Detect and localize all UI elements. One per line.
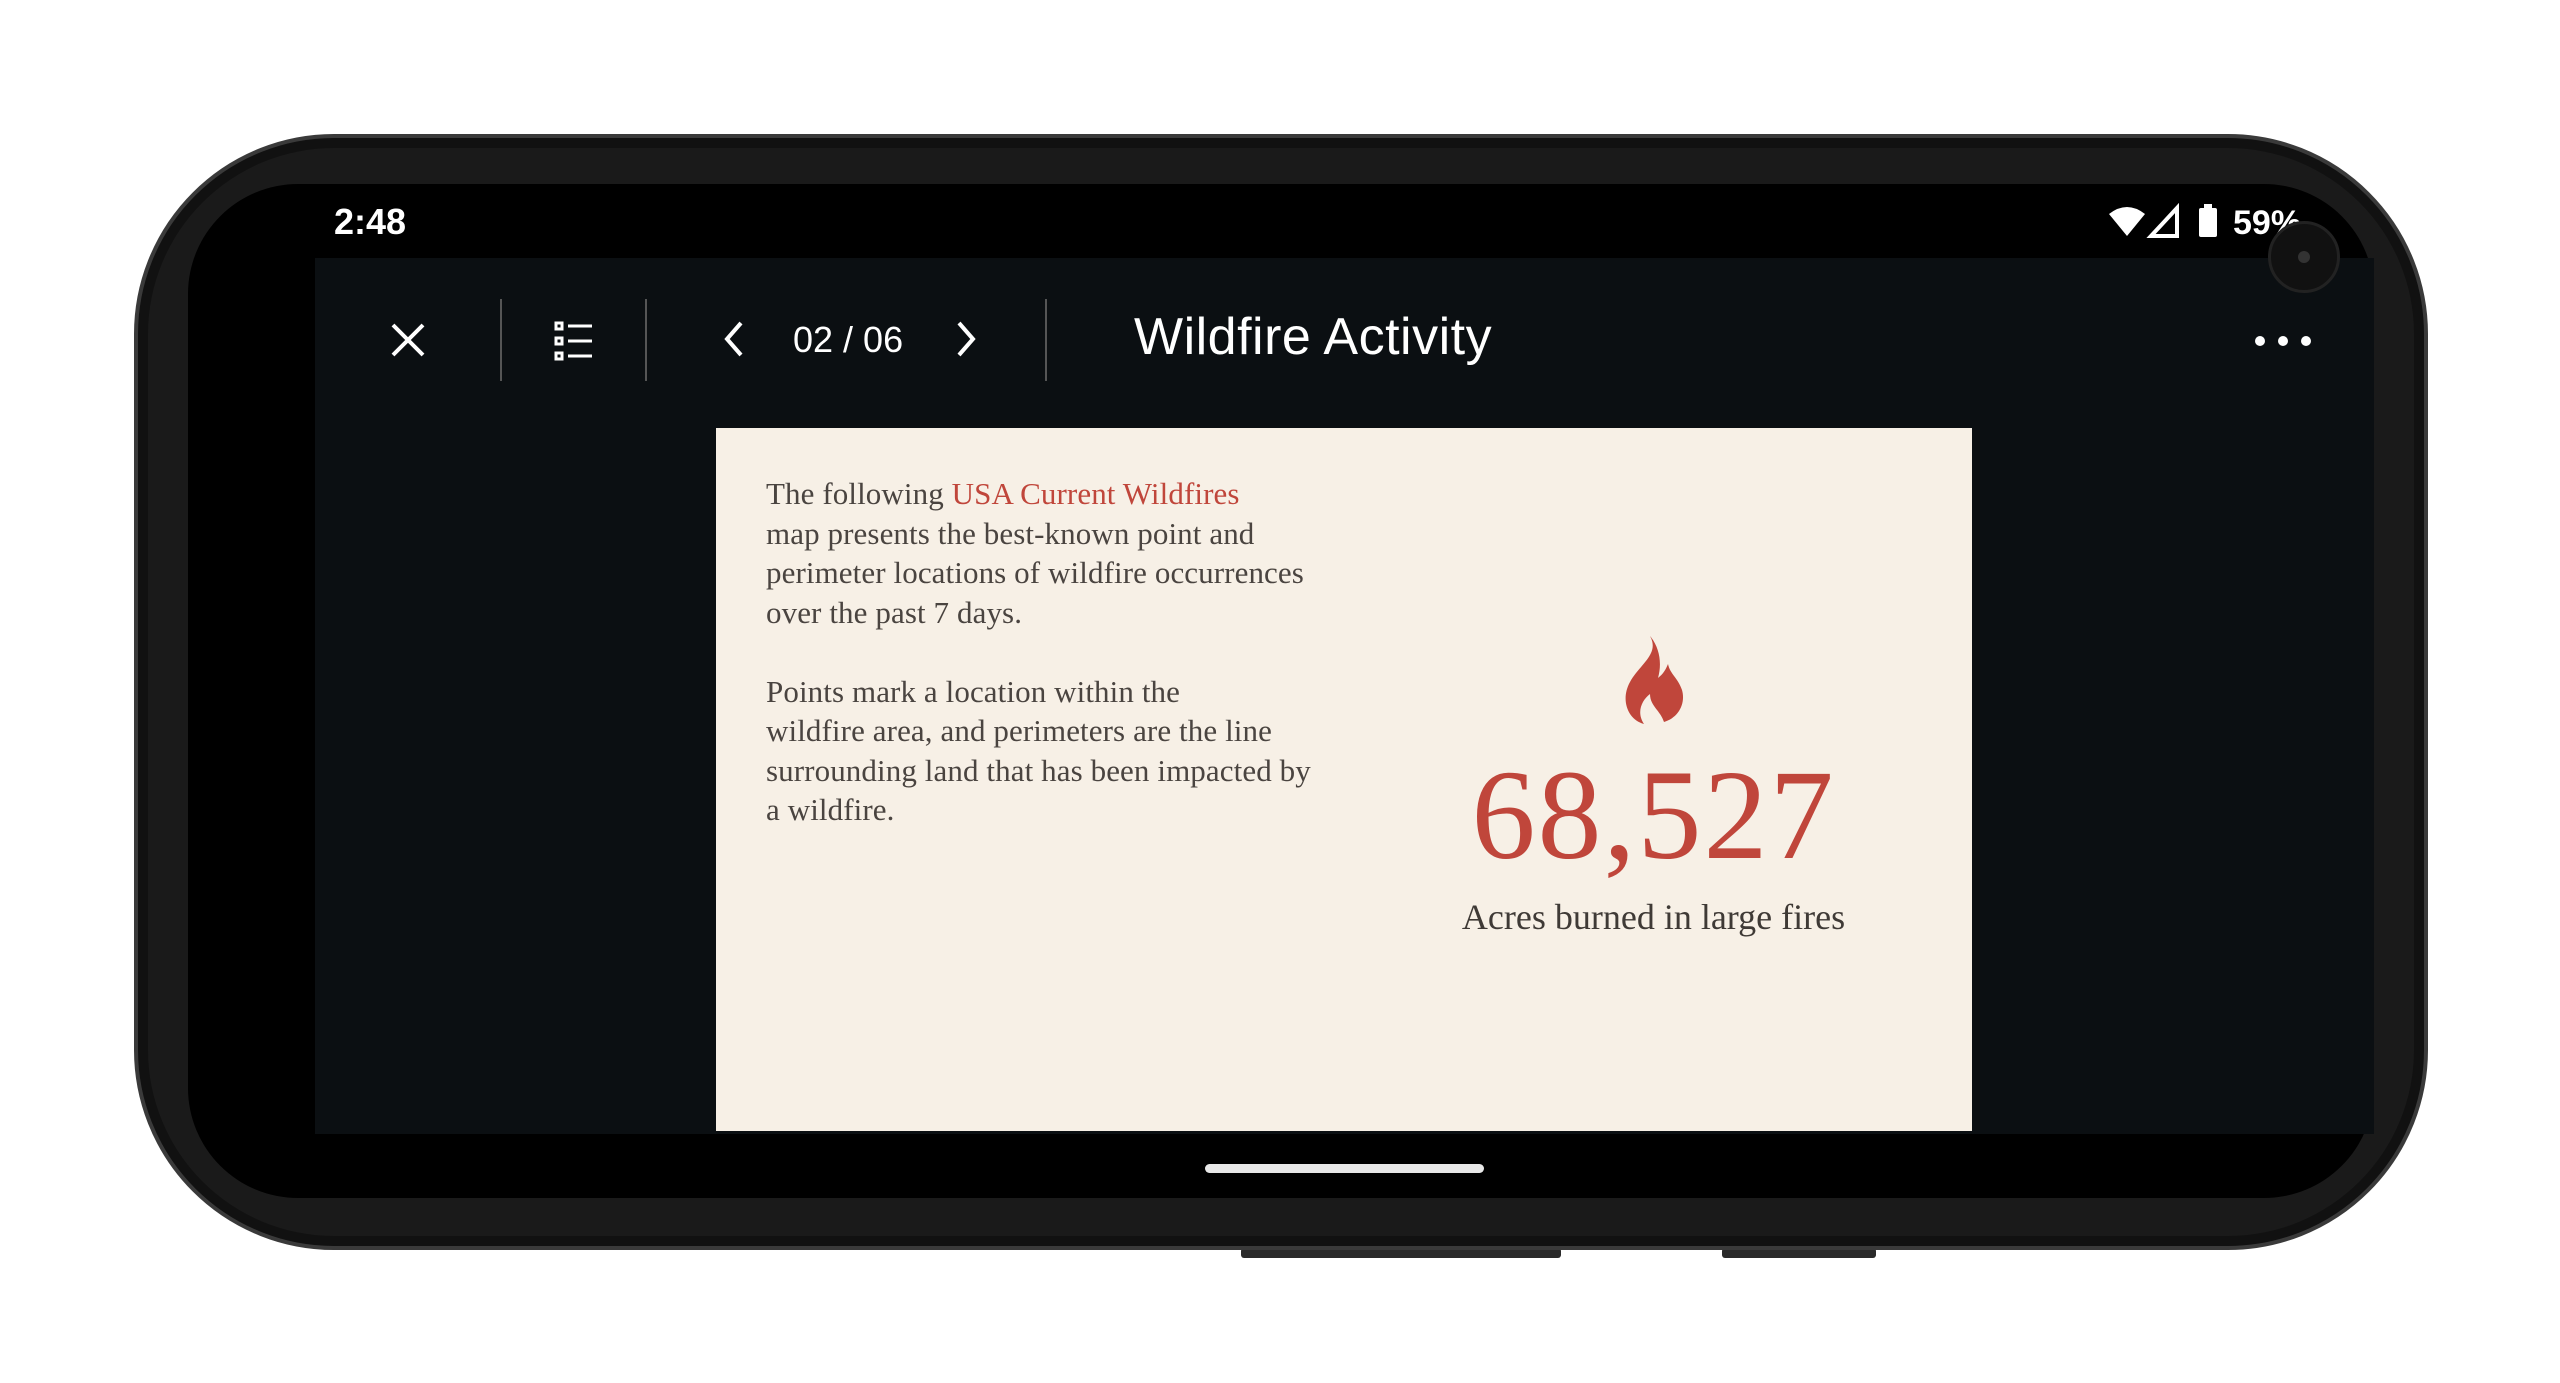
pager: 02 / 06 bbox=[793, 319, 903, 360]
text block: description: wildfire area, and perimeters are the line bbox=[766, 713, 1272, 748]
text block: description: map presents the best-known point and bbox=[766, 516, 1254, 550]
app area bbox=[315, 258, 2374, 1134]
icon: flame bbox=[1626, 636, 1683, 724]
icon: close bbox=[392, 324, 424, 356]
camera bbox=[2268, 221, 2340, 293]
caption: Acres burned in large fires bbox=[1462, 897, 1845, 937]
stat bbox=[1462, 636, 1845, 937]
phone side buttons bbox=[1241, 1248, 1561, 1258]
screen bbox=[188, 184, 2374, 1198]
status bar time: 2:48 bbox=[334, 201, 406, 242]
card bbox=[716, 428, 1972, 1131]
home indicator bbox=[1205, 1164, 1484, 1173]
text block: description: Points mark a location within the bbox=[766, 674, 1180, 708]
text block: description bbox=[766, 476, 1311, 827]
text block: description: over the past 7 days. bbox=[766, 594, 1022, 630]
phone frame bbox=[134, 134, 2428, 1250]
text block: description: surrounding land that has been impacted by bbox=[766, 752, 1311, 788]
status icons: 59% bbox=[2233, 204, 2301, 242]
big number: 68,527 bbox=[1472, 744, 1836, 886]
text block: description: perimeter locations of wildfire occurrences bbox=[766, 555, 1304, 590]
status icons bbox=[2109, 203, 2301, 242]
toolbar bbox=[392, 299, 2311, 381]
pager bbox=[724, 319, 976, 360]
text block: description: The following USA Current Wildfires bbox=[766, 476, 1240, 511]
title: Wildfire Activity bbox=[1134, 308, 1492, 366]
icon: more bbox=[2255, 336, 2311, 346]
text block: description: a wildfire. bbox=[766, 792, 894, 827]
icon: list bbox=[554, 322, 592, 360]
